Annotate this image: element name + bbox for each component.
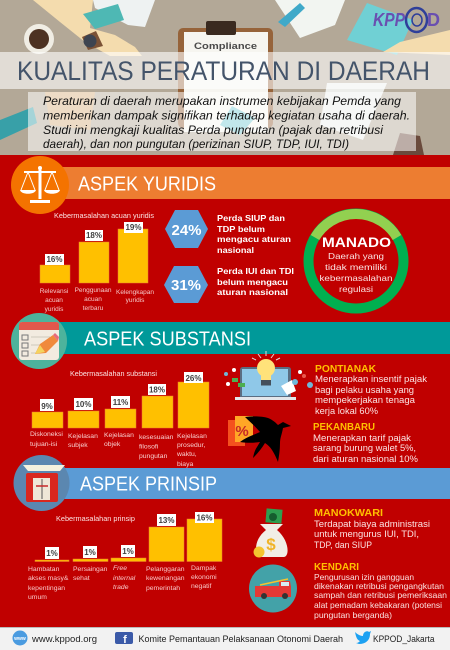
section: aspek yuridis xyxy=(11,156,450,313)
bar chart: acuan yuridis: Relevansi xyxy=(40,288,68,295)
text: perda IUI dan TDI: aturan nasional xyxy=(217,287,288,297)
city text: pekanbaru: dari aturan nasional 10% xyxy=(313,454,418,464)
bar chart: substansi: Kejelasan xyxy=(104,432,134,439)
bar chart: prinsip: pemerintah xyxy=(146,585,180,592)
bar chart: prinsip: Persaingan xyxy=(73,566,108,573)
bar chart: substansi: filosofi xyxy=(139,444,159,450)
bar chart: acuan yuridis: Penggunaan xyxy=(75,287,112,294)
hexagon stat: 24%: 24% xyxy=(171,222,202,239)
bar chart: acuan yuridis: yuridis xyxy=(45,306,64,313)
icon: twitter bird xyxy=(355,631,371,644)
bar chart: prinsip: trade xyxy=(113,584,129,591)
bar chart: prinsip: kepentingan xyxy=(28,585,65,592)
footer bar xyxy=(0,627,450,650)
bar chart: prinsip: Dampak xyxy=(191,565,217,572)
bar chart: acuan yuridis: acuan xyxy=(84,296,102,303)
bar chart: substansi: subjek xyxy=(68,442,88,449)
text: komite: Komite Pemantauan Pelaksanaan Otonomi Daerah xyxy=(138,634,343,644)
bar chart: prinsip: akses masy& xyxy=(28,575,69,582)
bar chart: prinsip: Kebermasalahan prinsip xyxy=(56,514,135,523)
text: perda SIUP dan TDP: TDP belum xyxy=(217,224,265,234)
bar chart: substansi: 9% xyxy=(41,402,53,411)
bar chart: substansi: Diskoneksi xyxy=(30,431,63,438)
bar chart: acuan yuridis: Kebermasalahan acuan yuridis xyxy=(54,211,154,220)
bar chart: substansi: 26% xyxy=(185,374,202,383)
text: perda IUI dan TDI xyxy=(217,266,294,297)
bar chart: prinsip: negatif xyxy=(191,583,212,590)
city text: pontianak xyxy=(315,364,428,416)
city text: manokwari: MANOKWARI xyxy=(314,508,383,519)
city text: pekanbaru: PEKANBARU xyxy=(313,422,375,433)
bar chart: substansi: Kejelasan xyxy=(68,433,98,440)
logo: KPPOD: D xyxy=(427,10,440,30)
heading bar: aspek prinsip xyxy=(60,468,450,499)
bar chart: substansi: biaya xyxy=(177,461,193,468)
bar chart: acuan yuridis: yuridis xyxy=(126,297,145,304)
callout: manado ring: kebermasalahan xyxy=(320,273,393,283)
bar chart: prinsip: 13% xyxy=(158,516,175,525)
icon: percent tag and swallow xyxy=(228,416,291,462)
city text: kendari xyxy=(314,562,447,620)
bar chart: prinsip xyxy=(28,512,222,601)
city text: kendari: Pengurusan izin gangguan xyxy=(314,573,414,582)
bar chart: prinsip: Hambatan xyxy=(28,566,60,573)
icon: checklist and pencil xyxy=(11,313,67,369)
city text: pontianak: mempekerjakan tenaga xyxy=(315,395,415,405)
icon: www globe: www xyxy=(13,636,26,642)
bar chart: substansi: waktu, xyxy=(176,451,197,458)
callout: manado ring: regulasi xyxy=(339,284,373,294)
bar chart: substansi: pungutan xyxy=(139,453,168,460)
bar chart: substansi: kesesuaian xyxy=(139,434,174,441)
hexagon stat: 31% xyxy=(164,266,208,303)
icon: fire truck xyxy=(249,564,297,612)
callout: manado ring: Daerah yang xyxy=(328,251,384,261)
text: perda SIUP dan TDP: Perda SIUP dan xyxy=(217,213,285,223)
city text: pekanbaru xyxy=(313,422,418,464)
text: perda SIUP dan TDP xyxy=(217,213,291,255)
bar chart: substansi xyxy=(30,369,209,468)
city text: pekanbaru: sarang burung walet 5%, xyxy=(313,443,416,453)
callout: manado ring xyxy=(308,214,404,308)
bar chart: acuan yuridis: 16% xyxy=(46,255,63,264)
icon: money bag: $ xyxy=(266,535,276,554)
city text: manokwari: Terdapat biaya administrasi xyxy=(314,519,430,529)
city text: pontianak: kerja lokal 60% xyxy=(315,406,378,416)
icon: scales of justice xyxy=(11,156,69,214)
city text: pontianak: PONTIANAK xyxy=(315,364,377,375)
city text: kendari: alat pemadam kebakaran (potensi xyxy=(314,601,442,610)
header photo: compliance desk xyxy=(0,0,450,155)
bar chart: prinsip: Free xyxy=(113,565,127,572)
bar chart: substansi: 11% xyxy=(113,398,128,407)
bar chart: substansi: tujuan-isi xyxy=(30,441,58,448)
bar chart: substansi: Kejelasan xyxy=(177,433,207,440)
icon: facebook xyxy=(115,632,133,646)
bar chart: acuan yuridis: terbaru xyxy=(83,305,104,312)
section: aspek substansi xyxy=(11,313,450,468)
bar chart: prinsip: Pelanggaran xyxy=(146,566,185,573)
city text: kendari: KENDARI xyxy=(314,562,359,573)
bar chart: prinsip: umum xyxy=(28,594,47,601)
text: perda SIUP dan TDP: mengacu aturan xyxy=(217,234,291,244)
bar chart: prinsip: sehat xyxy=(73,575,90,582)
city text: pekanbaru: Menerapkan tarif pajak xyxy=(313,433,412,443)
city text: manokwari xyxy=(314,508,430,550)
intro text block: Peraturan di daerah merupakan instrumen kebijakan Pemda yang xyxy=(43,94,401,108)
red background panel xyxy=(0,155,450,627)
bar chart: acuan yuridis: acuan xyxy=(45,297,63,304)
bar chart: substansi: Kebermasalahan substansi xyxy=(70,369,157,378)
bar chart: acuan yuridis: 18% xyxy=(86,231,102,240)
icon: laptop with light bulb xyxy=(224,351,313,400)
icon: www globe xyxy=(12,630,28,646)
city text: manokwari: untuk mengurus IUI, TDI, xyxy=(314,529,419,539)
bar chart: substansi: 10% xyxy=(75,400,92,409)
bar chart: substansi: prosedur, xyxy=(177,442,205,449)
city text: pontianak: Menerapkan insentif pajak xyxy=(315,374,428,384)
logo: KPPOD: KPP xyxy=(373,10,406,30)
bar chart: prinsip: ekonomi xyxy=(191,574,217,581)
city text: kendari: dikenakan retribusi pengangkutan xyxy=(314,582,444,591)
bar chart: acuan yuridis xyxy=(40,211,154,313)
icon: percent tag and swallow: % xyxy=(235,423,249,440)
intro text block xyxy=(28,92,416,151)
city text: manokwari: TDP, dan SIUP xyxy=(314,540,372,550)
heading bar: aspek substansi: ASPEK SUBSTANSI xyxy=(84,328,251,350)
heading bar: aspek yuridis xyxy=(60,167,450,199)
bar chart: prinsip: 1% xyxy=(84,548,96,557)
bar chart: prinsip: 16% xyxy=(196,514,213,522)
bar chart: acuan yuridis: Kelengkapan xyxy=(116,289,154,296)
bar chart: substansi: objek xyxy=(104,441,121,448)
intro text block: Studi ini mengkaji kualitas Perda pungutan (pajak dan retribusi xyxy=(43,123,383,137)
callout: manado ring: tidak memiliki xyxy=(325,262,387,272)
logo: KPPOD xyxy=(373,8,440,32)
text: twitter handle: KPPOD_Jakarta xyxy=(373,634,434,644)
bar chart: substansi: 18% xyxy=(149,386,165,394)
section: aspek prinsip xyxy=(14,455,450,620)
icon: weighing scale xyxy=(14,455,70,511)
bar chart: prinsip: 1% xyxy=(46,549,58,558)
city text: kendari: sampah dan retribusi pemeriksaan xyxy=(314,591,447,600)
intro text block: memberikan dampak signifikan terhadap kegiatan usaha di daerah. xyxy=(43,108,410,122)
text: perda SIUP dan TDP: nasional xyxy=(217,245,254,255)
hexagon stat: 31%: 31% xyxy=(171,277,201,294)
heading bar: aspek prinsip: ASPEK PRINSIP xyxy=(80,472,217,496)
text: perda IUI dan TDI: belum mengacu xyxy=(217,277,288,287)
compliance label: Compliance xyxy=(194,41,257,51)
city text: pontianak: bagi pelaku usaha yang xyxy=(315,385,414,395)
heading bar: aspek yuridis: ASPEK YURIDIS xyxy=(78,172,216,196)
text: website: www.kppod.org xyxy=(31,634,97,644)
text: perda IUI dan TDI: Perda IUI dan TDI xyxy=(217,266,294,276)
bar chart: prinsip: 1% xyxy=(122,547,134,556)
city text: kendari: pungutan berganda) xyxy=(314,611,392,620)
bar chart: acuan yuridis: 19% xyxy=(125,223,142,232)
icon: money bag xyxy=(254,508,288,558)
hexagon stat: 24% xyxy=(165,210,208,248)
icon: facebook: f xyxy=(123,634,127,646)
bar chart: prinsip: kewenangan xyxy=(146,575,185,582)
callout: manado ring: MANADO xyxy=(322,234,391,250)
heading bar: aspek substansi xyxy=(60,322,450,354)
intro text block: daerah), dan non pungutan (perizinan SIUP, TDP, IUI, TDI) xyxy=(43,137,349,151)
bar chart: prinsip: internal xyxy=(113,575,136,582)
